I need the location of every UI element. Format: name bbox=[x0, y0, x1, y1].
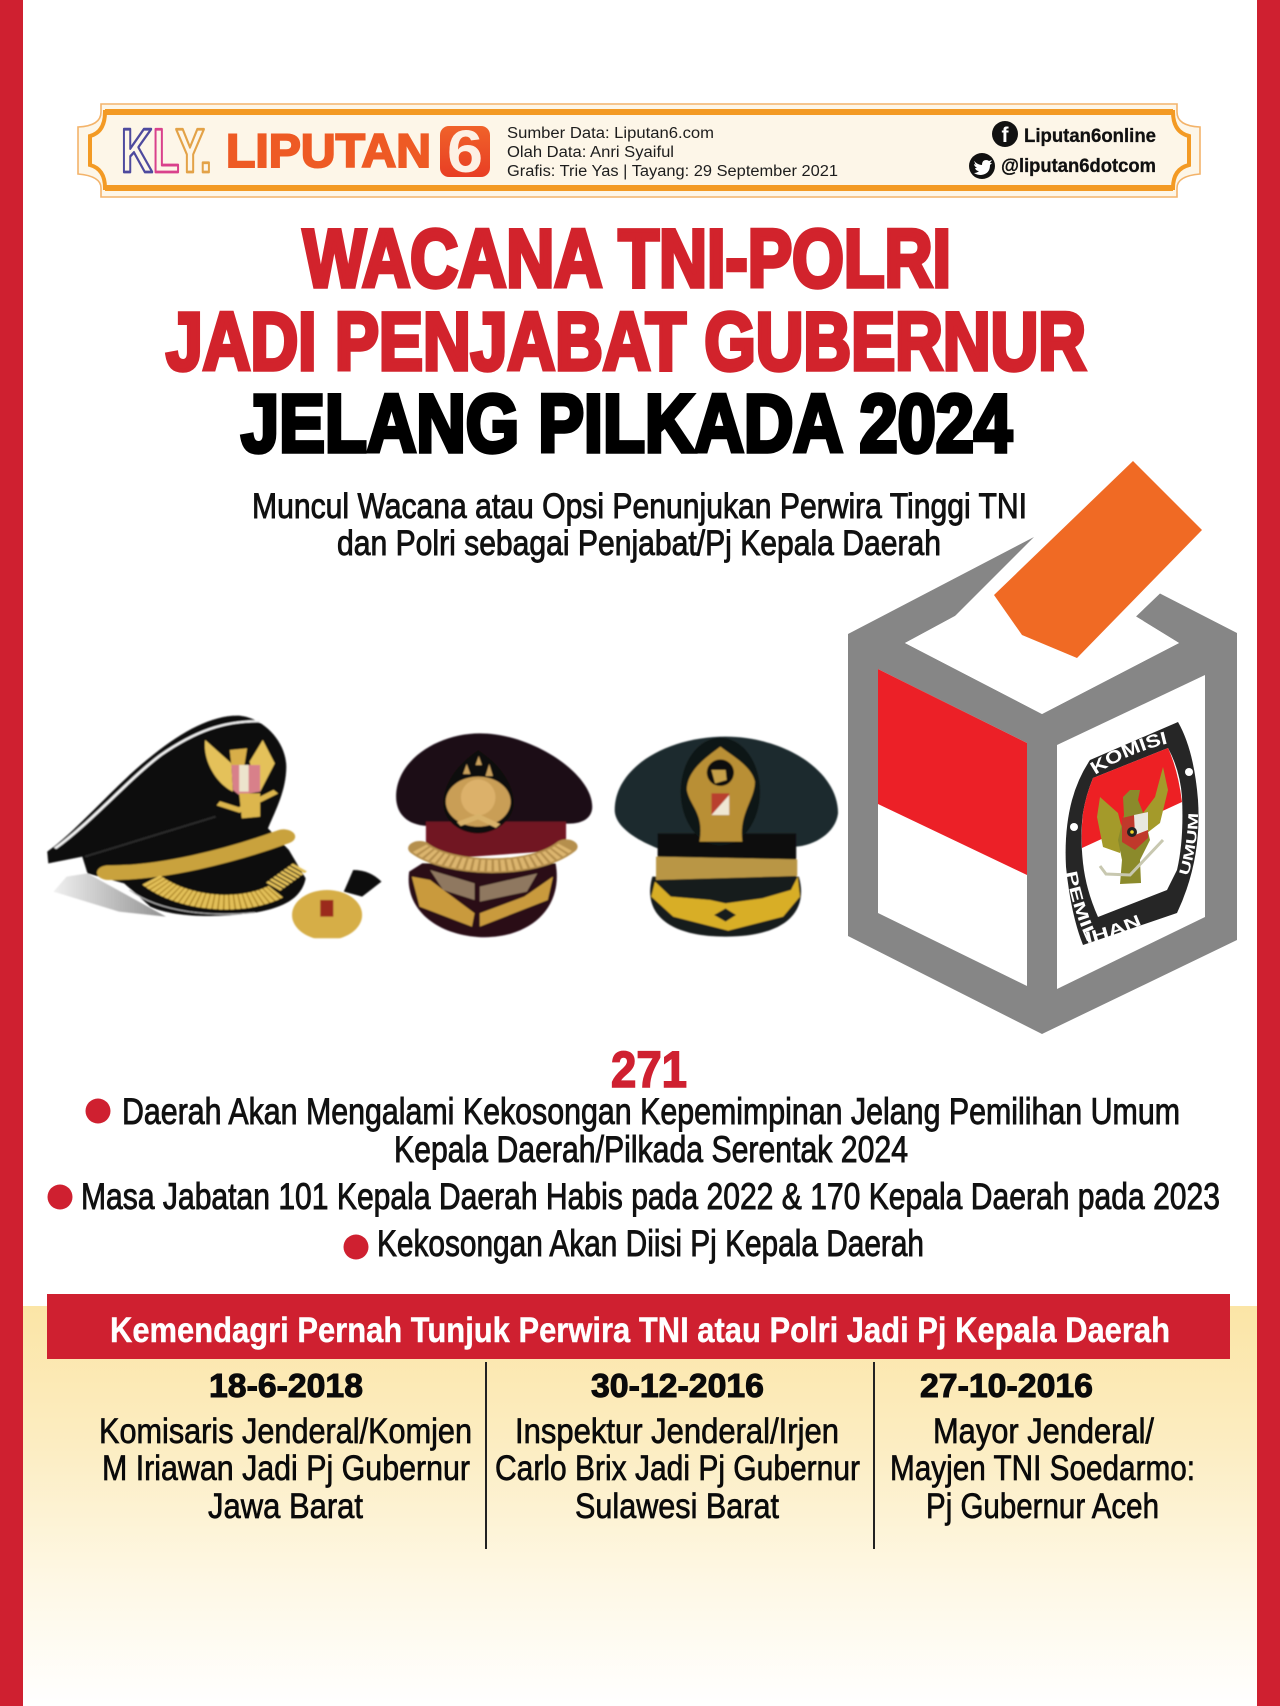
subtitle: dan Polri sebagai Penjabat/Pj Kepala Daerah bbox=[337, 524, 941, 563]
section banner bbox=[47, 1294, 1230, 1359]
hat: police cap bbox=[396, 733, 592, 937]
icon: facebook: f bbox=[1002, 124, 1010, 147]
bullet point 1: Kepala Daerah/Pilkada Serentak 2024 bbox=[394, 1129, 908, 1170]
hat group bbox=[47, 716, 838, 940]
timeline column: 2016 October: Pj Gubernur Aceh bbox=[926, 1487, 1159, 1526]
Liputan 6 badge bbox=[440, 118, 490, 185]
bullet point 3: Kekosongan Akan Diisi Pj Kepala Daerah bbox=[377, 1223, 924, 1264]
seal dots bbox=[1185, 768, 1193, 776]
banner frame bbox=[78, 104, 1200, 197]
source credits: Sumber Data: Liputan6.com bbox=[507, 125, 714, 142]
subtitle: Muncul Wacana atau Opsi Penunjukan Perwira Tinggi TNI bbox=[252, 487, 1027, 526]
KLY logo: KLY. bbox=[121, 117, 212, 186]
source credits: Olah Data: Anri Syaiful bbox=[507, 144, 674, 161]
title: WACANA TNI-POLRI bbox=[303, 214, 951, 304]
KPU seal bbox=[1066, 722, 1199, 945]
box top bbox=[905, 560, 1179, 714]
visor fronds bbox=[412, 877, 475, 927]
pin badge bbox=[344, 870, 381, 897]
key points list bbox=[48, 1091, 1220, 1264]
timeline column: 2016 December: Inspektur Jenderal/Irjen bbox=[515, 1412, 839, 1451]
seal lettering: KOMISI bbox=[1090, 732, 1167, 774]
timeline column: 2016 December: Carlo Brix Jadi Pj Gubernur bbox=[495, 1449, 860, 1488]
icon: facebook bbox=[992, 121, 1018, 147]
timeline column: 2018 bbox=[99, 1367, 472, 1526]
timeline column: 2016 October: Mayjen TNI Soedarmo: bbox=[890, 1449, 1195, 1488]
title bbox=[166, 214, 1086, 470]
emblem: garuda bbox=[205, 740, 276, 818]
timeline column: 2018: Jawa Barat bbox=[208, 1487, 363, 1526]
Liputan wordmark: LIPUTAN bbox=[226, 124, 431, 177]
emblem: eagle bbox=[687, 747, 755, 842]
timeline column: 2016 December bbox=[495, 1367, 860, 1526]
stat number: 271 bbox=[611, 1041, 687, 1098]
source credits: Grafis: Trie Yas | Tayang: 29 September 2021 bbox=[507, 163, 838, 180]
timeline column: 2018: 18-6-2018 bbox=[209, 1367, 363, 1404]
left face white bbox=[878, 669, 1027, 986]
section banner: Kemendagri Pernah Tunjuk Perwira TNI atau Polri Jadi Pj Kepala Daerah bbox=[110, 1311, 1170, 1350]
timeline column: 2018: M Iriawan Jadi Pj Gubernur bbox=[102, 1449, 470, 1488]
left face red stripe bbox=[878, 669, 1027, 875]
subtitle bbox=[252, 487, 1027, 563]
background gradient panel bbox=[23, 1306, 1257, 1706]
twitter handle: @liputan6dotcom bbox=[1001, 156, 1156, 177]
title: JELANG PILKADA 2024 bbox=[241, 379, 1012, 470]
hat: army cap bbox=[615, 737, 838, 937]
icon: ballot box bbox=[848, 461, 1237, 1034]
eagle emblem bbox=[1097, 767, 1168, 884]
timeline column: 2016 December: Sulawesi Barat bbox=[575, 1487, 779, 1526]
timeline column: 2016 October: Mayor Jenderal/ bbox=[933, 1412, 1154, 1451]
box frame bbox=[848, 537, 1237, 1034]
timeline column: 2016 October: 27-10-2016 bbox=[920, 1367, 1093, 1404]
seal lettering bbox=[1066, 732, 1198, 943]
timeline column: 2018: Komisaris Jenderal/Komjen bbox=[99, 1412, 472, 1451]
left red side bar bbox=[0, 0, 23, 1706]
visor oak leaves bbox=[651, 877, 800, 931]
emblem: police badge bbox=[443, 750, 514, 833]
rope band bbox=[420, 847, 566, 866]
column dividers bbox=[485, 1362, 875, 1549]
Liputan 6 badge: 6 bbox=[447, 118, 483, 185]
seal lettering: PEMILIHAN bbox=[1066, 872, 1141, 943]
header banner bbox=[78, 104, 1200, 197]
hat: governor cap bbox=[47, 716, 381, 940]
seal lettering: UMUM bbox=[1179, 814, 1198, 874]
right red side bar bbox=[1257, 0, 1280, 1706]
facebook handle: Liputan6online bbox=[1024, 126, 1156, 147]
ballot paper bbox=[994, 461, 1202, 658]
timeline column: 2016 December: 30-12-2016 bbox=[591, 1367, 764, 1404]
title: JADI PENJABAT GUBERNUR bbox=[166, 297, 1086, 388]
icon: twitter bbox=[969, 153, 995, 179]
bullet point 1 bbox=[86, 1091, 1180, 1170]
timeline column: 2016 October bbox=[890, 1367, 1195, 1526]
right face bbox=[1057, 675, 1205, 989]
source credits bbox=[507, 125, 838, 180]
